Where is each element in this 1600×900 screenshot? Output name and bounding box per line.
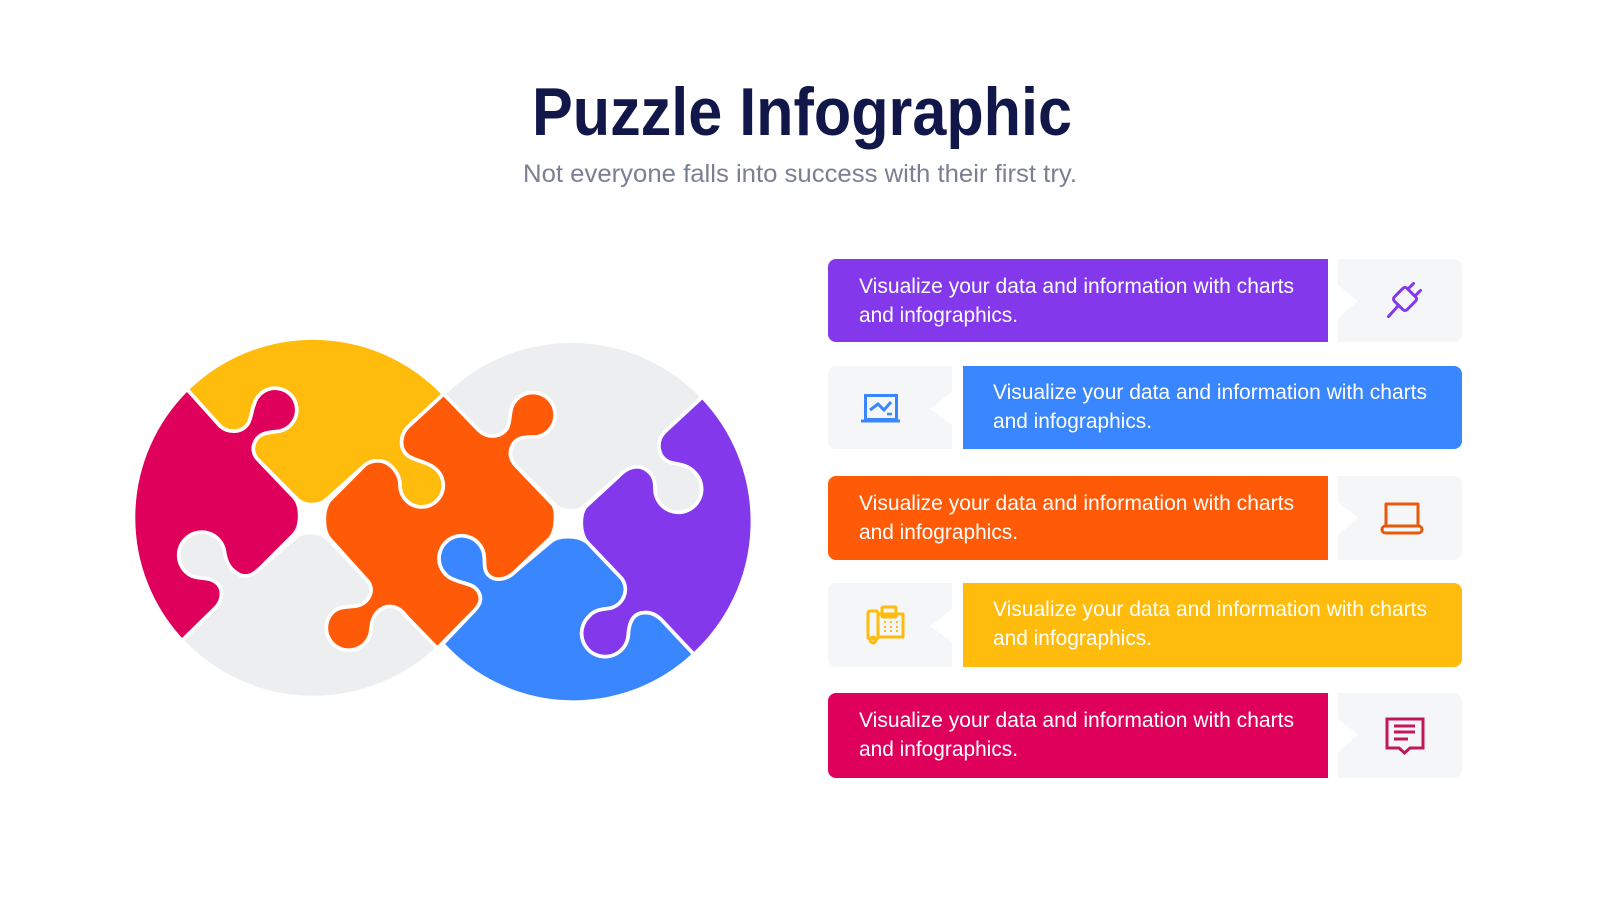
text bar: blue (963, 366, 1462, 449)
icon panel 2 (828, 366, 952, 449)
bar text 1 (859, 275, 1294, 327)
row 4: yellow (828, 583, 1462, 667)
bar text 5 (859, 709, 1294, 761)
bar text 4 (993, 598, 1427, 650)
icon: message (1387, 719, 1423, 753)
bar text 2 (993, 381, 1427, 433)
row 5: magenta (828, 693, 1462, 778)
text bar: magenta (828, 693, 1328, 778)
bar text 3 (859, 492, 1294, 544)
bar text 4: Visualize your data and information with charts (993, 598, 1427, 621)
icon panel 5 (1338, 693, 1462, 778)
icon: chart board (861, 396, 900, 421)
puzzle piece: grey left (179, 532, 437, 698)
bar text 5: and infographics. (859, 738, 1018, 761)
icon panel 3 (1338, 476, 1462, 560)
puzzle piece: yellow (187, 338, 444, 507)
bar text 3: and infographics. (859, 521, 1018, 544)
icon: plug (1388, 284, 1420, 316)
text bar: orange (828, 476, 1328, 560)
bar text 2: and infographics. (993, 410, 1152, 433)
puzzle piece: purple (581, 397, 752, 657)
bar text 1: and infographics. (859, 304, 1018, 327)
row 3: orange (828, 476, 1462, 560)
puzzle piece: grey right (444, 341, 702, 512)
bar text 5: Visualize your data and information with charts (859, 709, 1294, 732)
title: Puzzle Infographic (532, 74, 1072, 150)
icon panel 4 (828, 583, 952, 667)
icon: laptop (1382, 504, 1422, 533)
icon: fax (868, 607, 903, 643)
bar text 4: and infographics. (993, 627, 1152, 650)
bar text 3: Visualize your data and information with charts (859, 492, 1294, 515)
puzzle piece: orange (324, 393, 556, 650)
row 1: purple (828, 259, 1462, 342)
puzzle piece: magenta (133, 388, 300, 641)
subtitle: Not everyone falls into success with their first try. (523, 160, 1077, 188)
row 2: blue (828, 366, 1462, 449)
icon panel 1 (1338, 259, 1462, 342)
bar text 1: Visualize your data and information with charts (859, 275, 1294, 298)
puzzle piece: blue (439, 536, 694, 702)
text bar: purple (828, 259, 1328, 342)
text bar: yellow (963, 583, 1462, 667)
bar text 2: Visualize your data and information with charts (993, 381, 1427, 404)
puzzle graphic (133, 338, 752, 702)
